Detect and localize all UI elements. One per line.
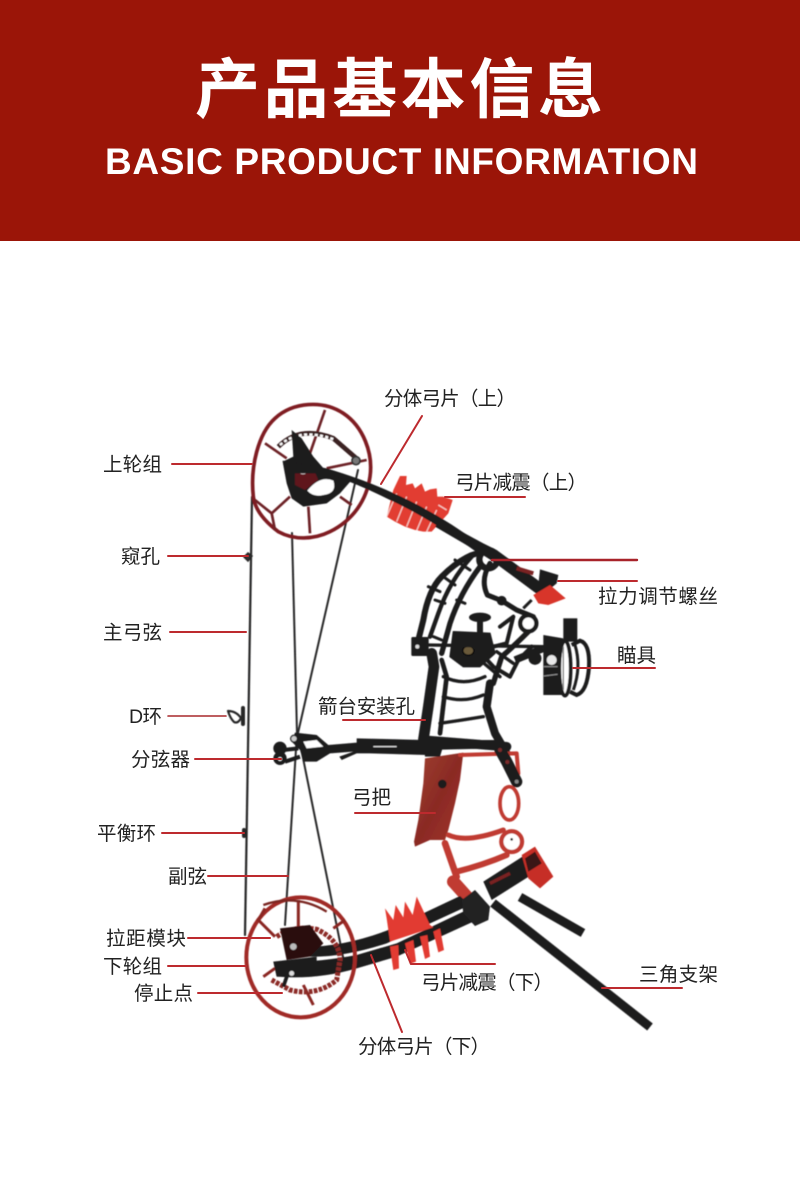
upper limb bbox=[283, 461, 483, 553]
draw-weight adjuster bbox=[435, 520, 566, 608]
black links bbox=[500, 750, 517, 782]
lower riser and grip bbox=[414, 740, 522, 898]
spokes bbox=[255, 410, 367, 533]
timing track bbox=[278, 433, 358, 460]
label: 分体弓片(上): 分体弓片（上） bbox=[384, 388, 516, 410]
left mounting block bbox=[412, 637, 428, 656]
limb tips bbox=[273, 957, 317, 977]
label: 瞄具: 瞄具 bbox=[617, 645, 656, 667]
label: 拉距模块: 拉距模块 bbox=[106, 928, 186, 950]
label: 分体弓片(下): 分体弓片（下） bbox=[358, 1036, 490, 1058]
lower limbs bbox=[273, 896, 473, 977]
label: 分体弓片(上) bbox=[381, 388, 516, 484]
tripod stand bbox=[493, 897, 650, 1027]
sight bbox=[515, 618, 589, 696]
limb pocket bbox=[462, 847, 553, 926]
label: 窥孔 bbox=[121, 546, 248, 568]
label: 主弓弦: 主弓弦 bbox=[103, 622, 162, 644]
main columns bbox=[423, 653, 434, 740]
cage ribs bbox=[418, 552, 488, 640]
label: 三角支架 bbox=[602, 964, 718, 988]
header banner bbox=[0, 0, 800, 241]
callout labels and leader lines bbox=[97, 388, 718, 1058]
riser upper frame bbox=[412, 550, 543, 753]
label: 弓把: 弓把 bbox=[352, 787, 391, 809]
label: 弓片减震(下): 弓片减震（下） bbox=[421, 972, 553, 994]
bow strings and cables bbox=[228, 470, 358, 957]
label: 上轮组: 上轮组 bbox=[103, 454, 162, 476]
label: 瞄具 bbox=[573, 645, 656, 668]
label: 平衡环: 平衡环 bbox=[97, 823, 156, 845]
label: 分体弓片(下) bbox=[358, 955, 490, 1058]
outer wheel bbox=[253, 404, 371, 538]
label: 箭台安装孔: 箭台安装孔 bbox=[318, 696, 415, 718]
inner cam lower bbox=[272, 928, 340, 992]
lower wheel bbox=[246, 897, 355, 1017]
label: 弓片减震(上): 弓片减震（上） bbox=[455, 472, 587, 494]
center body bbox=[450, 632, 495, 667]
cable guard arm bbox=[273, 733, 427, 765]
label: 弓把 bbox=[352, 787, 435, 813]
right frame bbox=[484, 563, 533, 617]
label: 拉力调节螺丝: 拉力调节螺丝 bbox=[598, 586, 718, 608]
label: 停止点: 停止点 bbox=[134, 983, 193, 1005]
label: 窥孔: 窥孔 bbox=[121, 546, 160, 568]
label: 下轮组: 下轮组 bbox=[103, 956, 162, 978]
label: 副弦: 副弦 bbox=[168, 866, 207, 888]
label: 分弦器: 分弦器 bbox=[131, 749, 190, 771]
inner cam bbox=[283, 430, 352, 507]
label: D环 bbox=[129, 706, 226, 728]
lower limb damper bbox=[385, 897, 444, 970]
upper cam bbox=[253, 404, 371, 538]
label: D环: D环 bbox=[129, 706, 162, 728]
compound bow illustration bbox=[228, 404, 650, 1027]
upper limb damper bbox=[387, 476, 453, 532]
label: 副弦 bbox=[168, 866, 288, 888]
label: 弓片减震(下) bbox=[405, 950, 553, 994]
chinese heading: 产品基本信息 bbox=[195, 53, 603, 126]
red frame bbox=[445, 753, 522, 898]
lower cam bbox=[246, 897, 355, 1017]
lower spokes bbox=[258, 900, 345, 1005]
label: 三角支架: 三角支架 bbox=[639, 964, 718, 986]
grip bbox=[414, 753, 463, 847]
title bbox=[105, 53, 698, 182]
english heading: BASIC PRODUCT INFORMATION bbox=[105, 141, 698, 182]
